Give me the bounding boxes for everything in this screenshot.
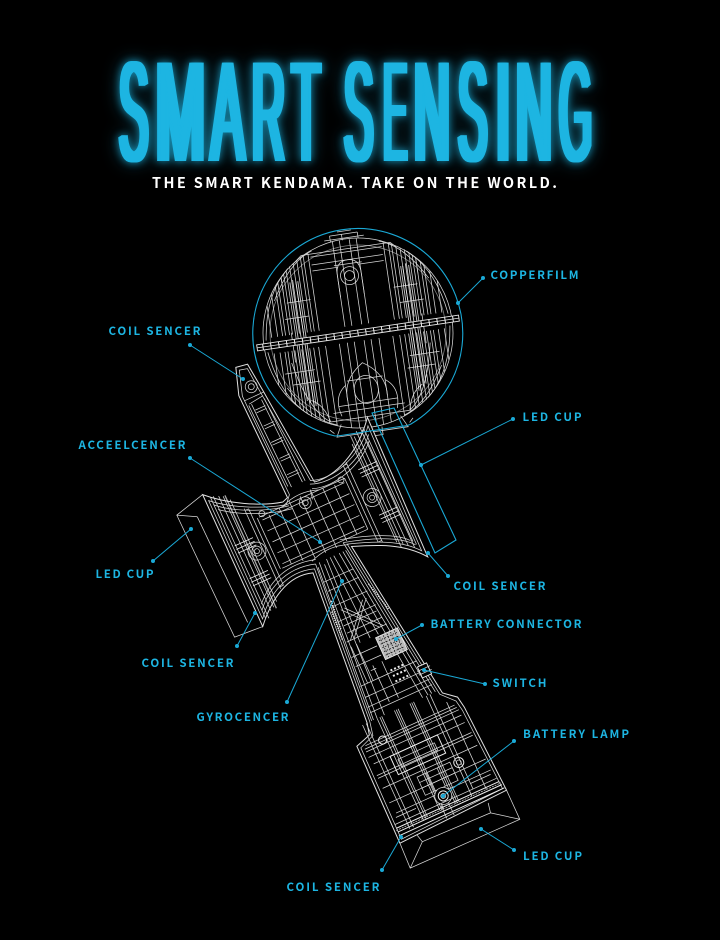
cup boxes [173, 423, 536, 896]
title: E [382, 33, 407, 192]
title: T [292, 33, 320, 192]
label: coil sencer left [142, 611, 257, 671]
spike ladder [238, 377, 316, 514]
label: led cup right [419, 409, 582, 467]
label: led cup right: LED CUP [522, 409, 582, 425]
title: N [516, 33, 552, 192]
kendama ball wireframe [242, 216, 474, 451]
label: gyrocencer: GYROCENCER [196, 709, 289, 725]
label: battery lamp [441, 726, 629, 798]
kendama ken wireframe [131, 326, 545, 896]
title: M [156, 33, 205, 192]
label: led cup left: LED CUP [96, 566, 154, 582]
subtitle: THE SMART KENDAMA. TAKE ON THE WORLD. [152, 172, 557, 193]
label: copperfilm [456, 267, 578, 305]
title: S [344, 33, 373, 192]
ken outline [160, 326, 534, 858]
title: N [414, 33, 450, 192]
label: acceelcencer [78, 437, 322, 544]
label: led cup bottom [479, 827, 582, 864]
label: copperfilm: COPPERFILM [490, 267, 578, 283]
label: coil sencer left: COIL SENCER [142, 655, 234, 671]
label: acceelcencer: ACCEELCENCER [78, 437, 186, 453]
title: S [119, 33, 148, 192]
label: switch [422, 668, 546, 691]
title: S [458, 33, 487, 192]
left cup rails [211, 485, 293, 620]
label: coil sencer bottom [286, 835, 403, 895]
label: coil sencer top [108, 323, 245, 381]
handle neck details [305, 541, 435, 720]
switch [416, 662, 433, 679]
label: switch: SWITCH [492, 675, 546, 691]
title: A [211, 33, 244, 192]
label: coil sencer bottom: COIL SENCER [286, 879, 380, 895]
handle base strip [391, 771, 506, 840]
handle base details [355, 684, 499, 832]
label: gyrocencer [196, 579, 344, 725]
title: R [252, 33, 285, 192]
title: I [496, 33, 510, 192]
title: G [559, 33, 592, 192]
centre grid [255, 474, 370, 574]
label: coil sencer right: COIL SENCER [454, 578, 546, 594]
label: coil sencer top: COIL SENCER [108, 323, 201, 339]
battery connector block [376, 628, 407, 660]
title [109, 33, 602, 192]
label: battery lamp: BATTERY LAMP [523, 726, 629, 742]
right cup rails [332, 426, 417, 560]
ball centre slat [257, 315, 459, 351]
label: coil sencer right [426, 551, 546, 594]
label: battery connector: BATTERY CONNECTOR [430, 616, 582, 632]
cyan ball outline and cup highlight [253, 228, 463, 553]
label: battery connector [394, 616, 582, 641]
label: led cup bottom: LED CUP [523, 848, 582, 864]
label: led cup left [96, 527, 193, 582]
